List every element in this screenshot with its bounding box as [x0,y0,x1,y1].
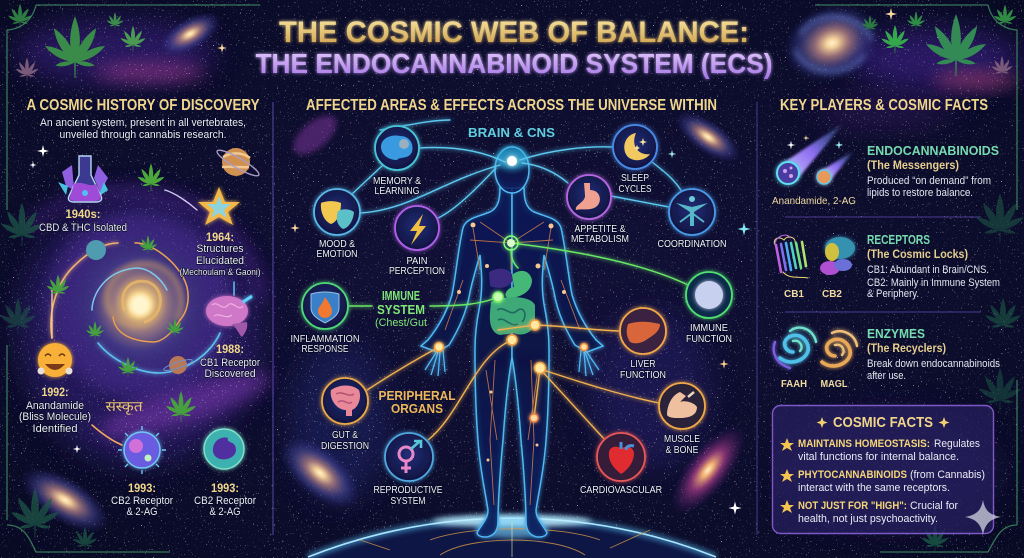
1993 label B: 1993: [211,481,239,495]
fact: not just for high [780,500,958,525]
1993 label A [111,481,173,518]
label: peripheral organs: PERIPHERAL [378,388,456,403]
label: anandamide: Anandamide, 2-AG [772,195,856,207]
1988 label: 1988: [216,342,244,356]
icon: saturn planet [215,147,261,179]
icon: small planet [163,356,193,374]
text: enzymes: after use. [867,370,906,382]
title: THE COSMIC WEB OF BALANCE: [279,16,749,49]
text: enzymes: Break down endocannabinoids [867,358,1001,370]
node: pain perception: PAIN [406,256,428,267]
icon: leaf 1 [137,163,165,191]
ground planet arc [308,515,716,558]
divider two [785,311,980,313]
node: pain perception [389,206,445,277]
labels: FAAH and MAGL [781,379,848,390]
intro text: unveiled through cannabis research. [60,129,226,141]
fact: not just for high: NOT JUST FOR "HIGH": [798,500,907,512]
node: reproductive system [374,433,443,507]
1940s label: 1940s: [66,207,100,221]
1940s label: CBD & THC Isolated [39,222,127,234]
column dividers [273,102,757,535]
connection lines [348,120,688,441]
node: inflammation response: INFLAMMATION [290,334,360,345]
heading: affected areas: AFFECTED AREAS & EFFECTS ACROSS THE UNIVERSE WITHIN [306,97,717,114]
panel: affected areas [290,97,732,558]
fact: phytocannabinoids [780,469,985,494]
text: enzymes: (The Recyclers) [867,341,946,355]
1964 label: Structures [196,243,244,255]
node: coordination [658,189,726,250]
node: appetite and metabolism [567,175,629,245]
1964 label [180,230,260,278]
node: cardiovascular: CARDIOVASCULAR [580,485,662,496]
node: immune function: FUNCTION [686,334,732,345]
node: sleep cycles: CYCLES [618,184,652,195]
fact: homeostasis [780,438,981,463]
timeline trails [52,182,234,456]
text: endocannabinoids [867,143,999,199]
node: pain perception: PERCEPTION [389,266,445,277]
icon: FAAH swirl [774,328,816,368]
node: mood and emotion [314,189,360,260]
text: receptors: CB1: Abundant in Brain/CNS. [867,264,989,276]
1992 label [19,385,91,435]
node: cardiovascular [580,433,662,496]
icon: CB2 receptor [820,237,855,275]
text: receptors: & Periphery. [867,288,919,300]
title: THE ENDOCANNABINOID SYSTEM (ECS) [256,48,772,79]
node: memory and learning: MEMORY & [373,176,421,187]
text: enzymes [867,326,1001,382]
node: immune function [686,272,732,345]
human body figure [421,147,603,537]
sanskrit word: संस्कृत [106,398,144,415]
icon: brain [206,296,252,337]
text: receptors: (The Cosmic Locks) [867,247,968,261]
1988 label: Discovered [204,368,256,380]
node: gut and digestion: GUT & [332,430,358,441]
node: reproductive system: REPRODUCTIVE [374,485,443,496]
label: immune system: SYSTEM [377,302,425,317]
labels: CB1 and CB2: CB2 [822,289,842,300]
1993 label B: & 2-AG [210,506,240,518]
labels: FAAH and MAGL: FAAH [781,379,807,390]
heading: cosmic facts: COSMIC FACTS [833,414,933,431]
1940s label [39,207,127,234]
label: immune system: IMMUNE [382,288,420,303]
node: sleep cycles [613,125,657,195]
fact: phytocannabinoids: PHYTOCANNABINOIDS [798,469,907,481]
1988 label: CB1 Receptor [200,357,260,369]
node: coordination: COORDINATION [658,239,726,250]
node: gut and digestion [321,378,369,452]
node: memory and learning [373,126,421,197]
node: liver function [620,308,666,381]
intro text: An ancient system, present in all vertebrates, [40,117,246,129]
fact: homeostasis: vital functions for internal balance. [798,451,959,463]
node: gut and digestion: DIGESTION [321,441,369,452]
fact: homeostasis: MAINTAINS HOMEOSTASIS: [798,438,930,450]
1992 label: 1992: [42,385,68,399]
text: endocannabinoids: lipids to restore balance. [867,187,973,199]
label: peripheral organs: ORGANS [391,401,443,416]
label: immune system: (Chest/Gut [375,317,427,329]
1964 label: (Mechoulam & Gaoni) [180,267,260,278]
node: memory and learning: LEARNING [374,186,420,197]
fact: homeostasis: Regulates [934,438,981,450]
fact: not just for high: Crucial for [910,500,958,512]
node: muscle and bone: & BONE [666,445,699,456]
1988 label [200,342,260,380]
node: reproductive system: SYSTEM [390,496,426,507]
node: sleep cycles: SLEEP [621,173,649,184]
1993 label A: & 2-AG [126,506,158,518]
icon: comets [777,122,855,184]
node: appetite and metabolism: METABOLISM [571,234,629,245]
text: endocannabinoids: Produced “on demand” from [867,175,991,187]
1993 label B [194,481,256,518]
title [256,16,772,79]
node: inflammation response [290,283,360,355]
panel: discovery history [19,97,261,518]
node: muscle and bone: MUSCLE [664,434,700,445]
orbit leaves [46,235,197,422]
label: peripheral organs [378,388,456,416]
text: enzymes: ENZYMES [867,326,925,341]
heading: history: A COSMIC HISTORY OF DISCOVERY [26,97,260,114]
icon: sparkle watermark [965,500,1001,535]
intro text [40,117,246,141]
icon: MAGL swirl [822,331,857,366]
1992 label: (Bliss Molecule) [19,411,91,423]
node: appetite and metabolism: APPETITE & [574,224,626,235]
icon: CB1 receptor [774,235,808,278]
1993 label A: CB2 Receptor [111,495,173,507]
node: liver function: FUNCTION [620,370,666,381]
1993 label A: 1993: [128,481,156,495]
icon: star [198,187,240,225]
1964 label: Elucidated [196,255,244,267]
body nodes [434,156,588,422]
node: mood and emotion: MOOD & [319,239,355,250]
node: immune function: IMMUNE [690,323,728,334]
text: receptors [867,232,1000,300]
text: endocannabinoids: ENDOCANNABINOIDS [867,143,999,158]
central spiral galaxy [48,213,232,397]
text: receptors: RECEPTORS [867,232,930,247]
node: mood and emotion: EMOTION [316,249,358,260]
node: liver function: LIVER [630,359,656,370]
labels: FAAH and MAGL: MAGL [820,379,848,390]
1993 label B: CB2 Receptor [194,495,256,507]
panel: cosmic facts [772,406,994,534]
label: immune system [375,288,427,329]
text: receptors: CB2: Mainly in Immune System [867,277,1000,289]
1992 label: Identified [32,423,78,435]
icon: teal planet [86,240,106,260]
node: muscle and bone [659,383,705,456]
icon: flask [58,156,108,202]
labels: CB1 and CB2: CB1 [784,289,804,300]
fact: phytocannabinoids: (from Cannabis) [910,469,985,481]
panel: key players [772,97,1001,535]
1992 label: Anandamide [26,400,84,412]
fact: phytocannabinoids: interact with the same receptors. [798,482,950,494]
icon: cell 1 [118,426,166,474]
icon: smiling face [38,343,72,377]
icon: cell 2 [204,429,244,469]
labels: CB1 and CB2 [784,289,842,300]
node: inflammation response: RESPONSE [302,344,349,355]
internal organs [489,269,535,335]
label: brain and CNS: BRAIN & CNS [468,125,555,140]
1964 label: 1964: [206,230,234,244]
divider one [785,216,980,218]
heading: key players: KEY PLAYERS & COSMIC FACTS [780,97,988,114]
fact: not just for high: health, not just psychoactivity. [798,513,938,525]
text: endocannabinoids: (The Messengers) [867,158,959,172]
